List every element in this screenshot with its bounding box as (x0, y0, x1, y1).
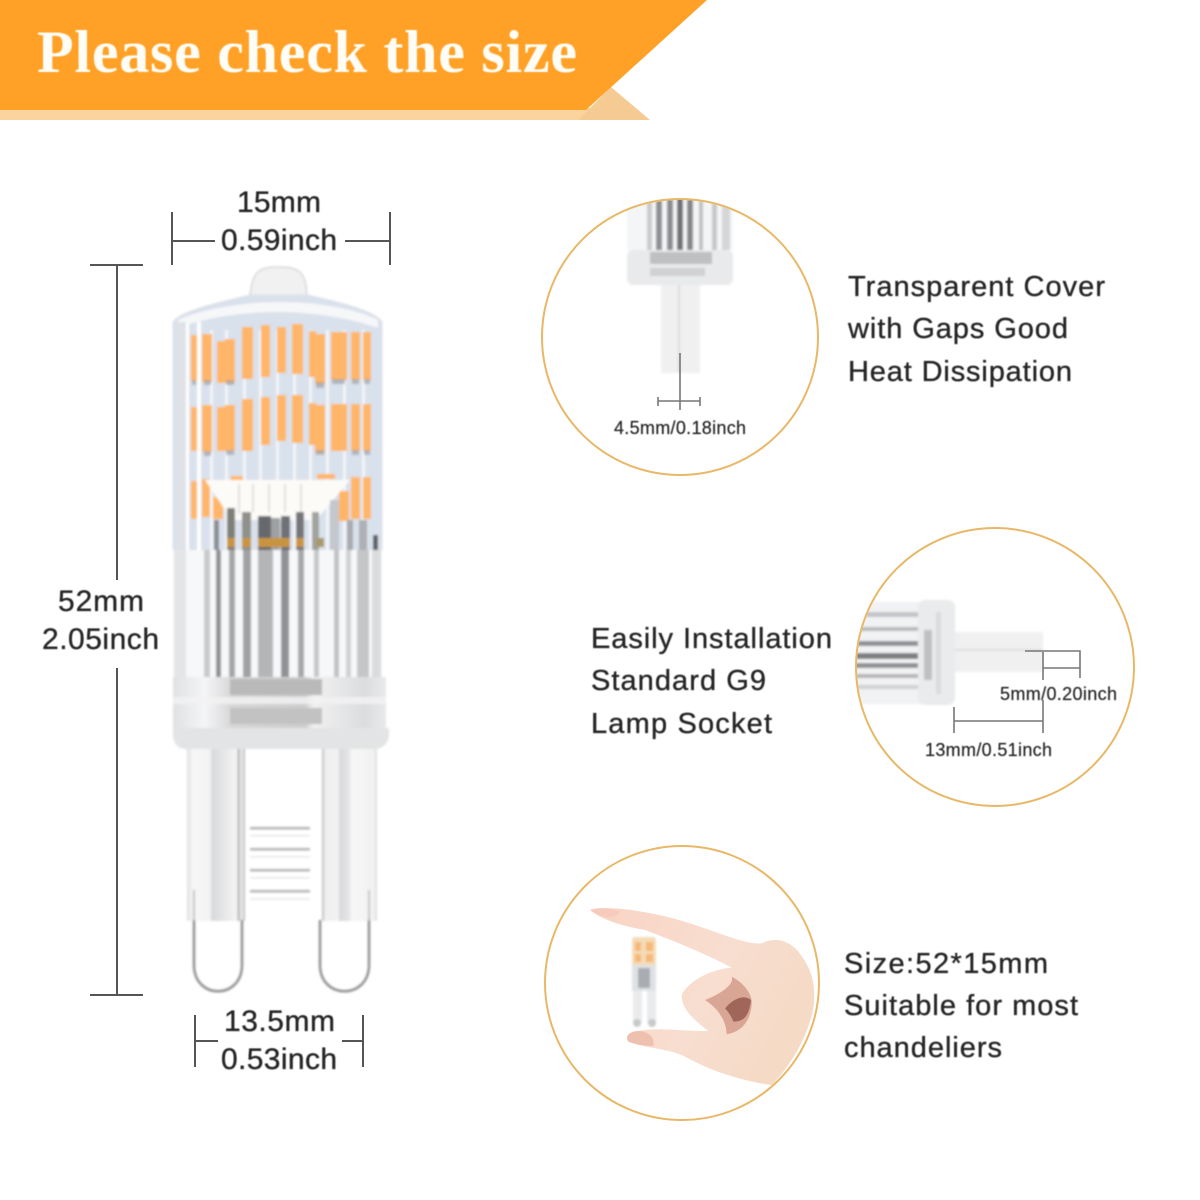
main G9 bulb illustration (173, 267, 389, 991)
reflective funnel (205, 480, 350, 520)
collar (173, 677, 386, 729)
short pin label: 5mm/0.20inch (1000, 684, 1117, 704)
sideways bulb end and pin (855, 600, 1043, 705)
left wire loop (194, 920, 242, 991)
text: size: Size:52*15mm (844, 948, 1048, 980)
circle: hand holding bulb (545, 846, 819, 1120)
right pin (322, 749, 377, 921)
LED row 2 (192, 396, 370, 452)
circle: pin length detail (855, 528, 1134, 806)
top width dimension (172, 186, 390, 265)
text: transparent cover: with Gaps Good (847, 313, 1068, 345)
left pin (187, 749, 245, 921)
base ring (173, 728, 389, 749)
inner wire traces (194, 890, 369, 920)
lower fins (173, 550, 382, 677)
top width dimension: 0.59inch (221, 224, 337, 257)
pin dimension marks (658, 353, 700, 410)
pin spacing dimension (195, 1005, 363, 1076)
text: transparent cover: Heat Dissipation (848, 356, 1072, 388)
title banner (0, 0, 707, 120)
bulb end with single pin (627, 198, 733, 373)
text: easy installation: Lamp Socket (591, 708, 772, 740)
text: transparent cover (847, 271, 1105, 388)
LED row 3 (192, 475, 370, 520)
circle outline (542, 199, 818, 475)
height dimension: 52mm (58, 585, 144, 618)
text: size (844, 948, 1078, 1064)
circle outline (856, 528, 1134, 806)
top width dimension: 15mm (237, 186, 321, 219)
circle outline (545, 846, 819, 1120)
LED row 1 (192, 325, 370, 383)
height dimension (42, 265, 159, 995)
small bulb held in fingers (632, 937, 656, 1027)
pin spacing dimension: 0.53inch (221, 1043, 337, 1076)
height dimension: 2.05inch (42, 623, 159, 656)
contact lines (250, 827, 310, 900)
long pin label: 13mm/0.51inch (925, 740, 1052, 760)
text: transparent cover: Transparent Cover (848, 271, 1105, 303)
wire and length dimension marks (954, 651, 1080, 733)
LED section (173, 295, 382, 550)
text: easy installation: Easily Installation (591, 623, 832, 655)
right wire loop (320, 920, 369, 991)
hand (590, 908, 814, 1085)
text: easy installation: Standard G9 (591, 665, 766, 697)
title: Please check the size (37, 19, 577, 85)
pin width label: 4.5mm/0.18inch (614, 418, 746, 438)
text: size: Suitable for most (844, 990, 1078, 1022)
text: easy installation (591, 623, 832, 740)
text: size: chandeliers (844, 1032, 1002, 1064)
bulb tip (250, 267, 307, 297)
upper dark fins (214, 500, 378, 550)
circle: pin width detail (542, 198, 818, 475)
pin spacing dimension: 13.5mm (224, 1005, 335, 1038)
